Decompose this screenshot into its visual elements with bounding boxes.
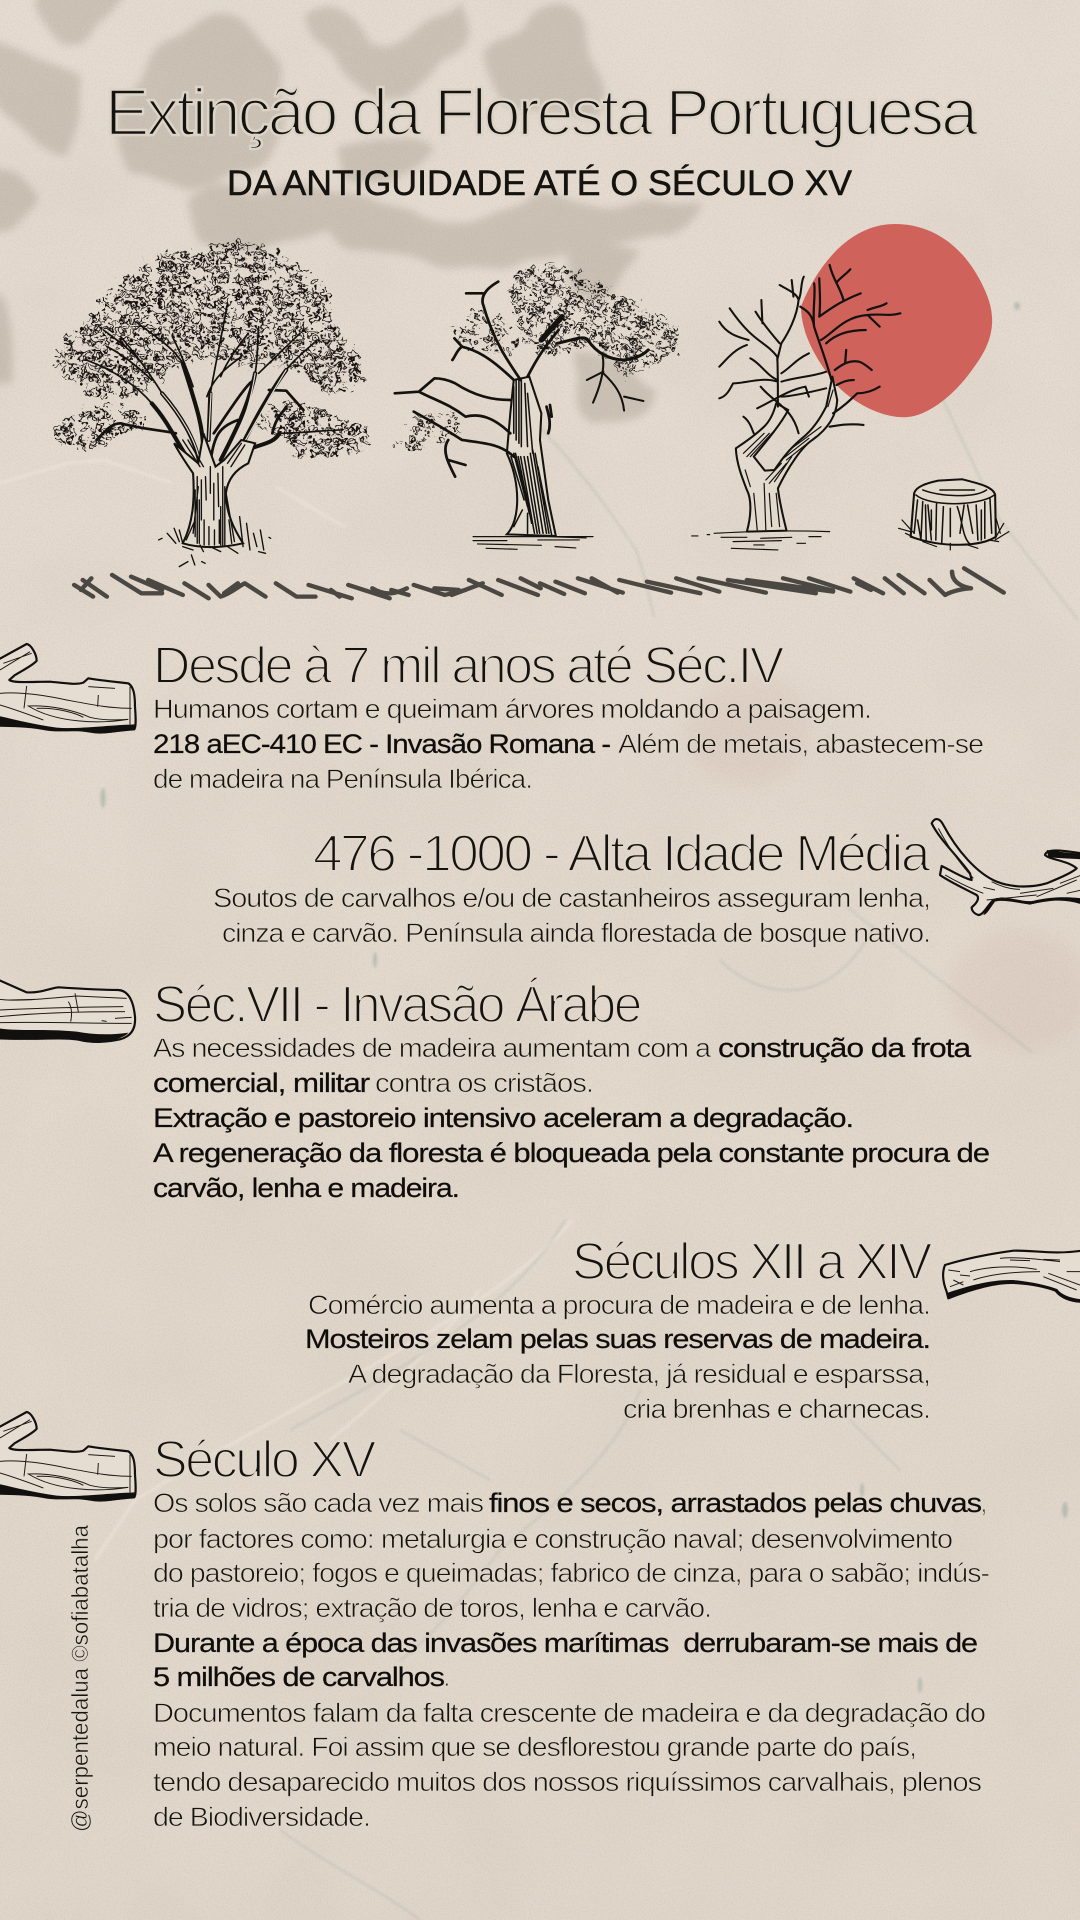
body text: .	[444, 1662, 449, 1692]
body text: Soutos de carvalhos e/ou de castanheiros asseguram lenha,	[213, 883, 930, 913]
body text: contra os cristãos.	[375, 1068, 593, 1098]
icon: log	[0, 980, 135, 1043]
heading: Séculos XII a XIV	[572, 1233, 933, 1291]
body text: A degradação da Floresta, já residual e esparssa,	[348, 1359, 930, 1389]
body text	[213, 883, 930, 948]
heading: Séc.VII - Invasão Árabe	[153, 976, 640, 1034]
body text: cria brenhas e charnecas.	[623, 1394, 930, 1424]
heading: 476 -1000 - Alta Idade Média	[313, 825, 930, 883]
body text: meio natural. Foi assim que se desflorestou grande parte do país,	[153, 1732, 916, 1762]
section: Desde à 7 mil anos	[0, 637, 983, 794]
body text: finos e secos, arrastados pelas chuvas	[489, 1488, 982, 1518]
ground brush strokes	[74, 568, 1004, 598]
vertical credit: @serpentedalua ©sofiabatalha	[67, 1525, 93, 1832]
body text: Mosteiros zelam pelas suas reservas de madeira.	[305, 1324, 930, 1354]
body text: ,	[981, 1488, 986, 1518]
dead tree	[692, 265, 900, 550]
body text: comercial, militar	[153, 1068, 370, 1098]
section: Séculos XII a XIV	[305, 1233, 1080, 1424]
body text: tria de vidros; extração de toros, lenha e carvão.	[153, 1593, 711, 1623]
body text: por factores como: metalurgia e construção naval; desenvolvimento	[153, 1524, 952, 1554]
body text: Durante a época das invasões marítimas derrubaram-se mais de	[153, 1628, 977, 1658]
body text: Documentos falam da falta crescente de madeira e da degradação do	[153, 1698, 985, 1728]
leafy tree	[52, 240, 372, 567]
body text: Extração e pastoreio intensivo aceleram a degradação.	[153, 1103, 853, 1133]
icon: antler branch	[932, 819, 1080, 915]
red sun	[801, 224, 992, 417]
body text: As necessidades de madeira aumentam com a	[153, 1033, 712, 1063]
section: Invasão Árabe	[0, 976, 989, 1203]
illustration: tree sequence	[52, 224, 1009, 567]
body text: tendo desaparecido muitos dos nossos riquíssimos carvalhais, plenos	[153, 1767, 981, 1797]
body text: Além de metais, abastecem-se	[618, 729, 983, 759]
icon: log	[0, 1412, 136, 1502]
heading: Desde à 7 mil anos até Séc.IV	[153, 637, 785, 695]
title: Extinção da Floresta Portuguesa	[105, 75, 978, 149]
section: Alta Idade Média	[213, 819, 1080, 948]
body text	[305, 1290, 930, 1424]
body text	[153, 1488, 989, 1832]
body text: de Biodiversidade.	[153, 1802, 370, 1832]
body text: 218 aEC-410 EC - Invasão Romana -	[153, 729, 610, 759]
body text: A regeneração da floresta é bloqueada pela constante procura de	[153, 1138, 989, 1168]
section: Século XV	[0, 1412, 989, 1832]
leaf shadows	[0, 0, 700, 426]
body text: cinza e carvão. Península ainda florestada de bosque nativo.	[222, 918, 930, 948]
tree stump	[899, 479, 1009, 550]
body text	[153, 1033, 989, 1203]
body text: 5 milhões de carvalhos	[153, 1662, 445, 1692]
subtitle: DA ANTIGUIDADE ATÉ O SÉCULO XV	[227, 164, 853, 203]
body text	[153, 694, 983, 794]
body text: carvão, lenha e madeira.	[153, 1173, 459, 1203]
body text: do pastoreio; fogos e queimadas; fabrico de cinza, para o sabão; indús-	[153, 1558, 989, 1588]
half-dead tree	[393, 266, 678, 549]
body text: Humanos cortam e queimam árvores moldando a paisagem.	[153, 694, 871, 724]
icon: log	[0, 644, 136, 734]
icon: log	[943, 1251, 1080, 1303]
body text: de madeira na Península Ibérica.	[153, 764, 532, 794]
heading: Século XV	[153, 1431, 377, 1489]
body text: Os solos são cada vez mais	[153, 1488, 483, 1518]
body text: Comércio aumenta a procura de madeira e de lenha.	[308, 1290, 930, 1320]
body text: construção da frota	[718, 1033, 972, 1063]
